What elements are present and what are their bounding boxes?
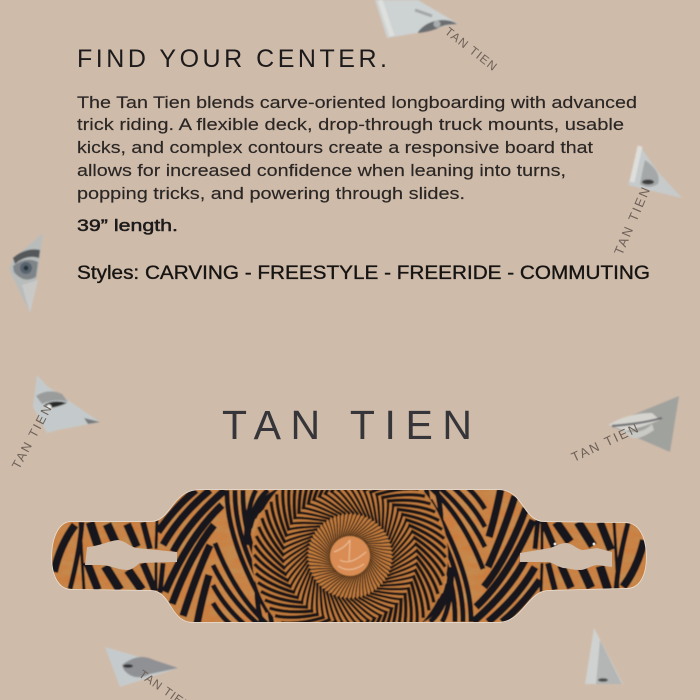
fragment: bottom right nose xyxy=(585,628,623,684)
product name: TAN TIEN xyxy=(222,402,472,448)
styles list: Styles: CARVING - FREESTYLE - FREERIDE - COMMUTING xyxy=(77,263,650,284)
deck edge xyxy=(52,490,646,622)
fragment: left eye with label xyxy=(9,375,100,471)
label: TAN TIEN xyxy=(611,185,653,257)
label: TAN TIEN xyxy=(569,421,641,465)
body text: kicks, and complex contours create a responsive board that xyxy=(77,138,593,157)
deck graphic xyxy=(52,490,646,622)
fragment: top eye xyxy=(375,0,500,74)
center wood disc xyxy=(330,536,370,576)
body text xyxy=(77,93,637,203)
heading: find your center: FIND YOUR CENTER. xyxy=(77,45,387,73)
label: TAN TIEN xyxy=(442,24,500,74)
body text: popping tricks, and powering through slides. xyxy=(77,184,465,203)
fragment: left eye xyxy=(9,233,43,313)
fragment: upper right nose xyxy=(611,146,682,257)
left truck slot xyxy=(85,540,177,570)
length spec: 39” length. xyxy=(77,216,178,235)
body text: The Tan Tien blends carve-oriented longboarding with advanced xyxy=(77,93,637,112)
body text: allows for increased confidence when leaning into turns, xyxy=(77,161,566,180)
right truck slot xyxy=(520,543,612,570)
fragment: bottom left lips xyxy=(105,647,193,700)
label: TAN TIEN xyxy=(9,403,55,471)
skateboard deck xyxy=(51,489,647,623)
stripes: left and right ends xyxy=(54,488,644,624)
truck bolts xyxy=(554,542,596,546)
body text: trick riding. A flexible deck, drop-through truck mounts, usable xyxy=(77,115,624,134)
center spiral rings xyxy=(251,490,449,622)
fragment: right lips xyxy=(569,396,679,465)
